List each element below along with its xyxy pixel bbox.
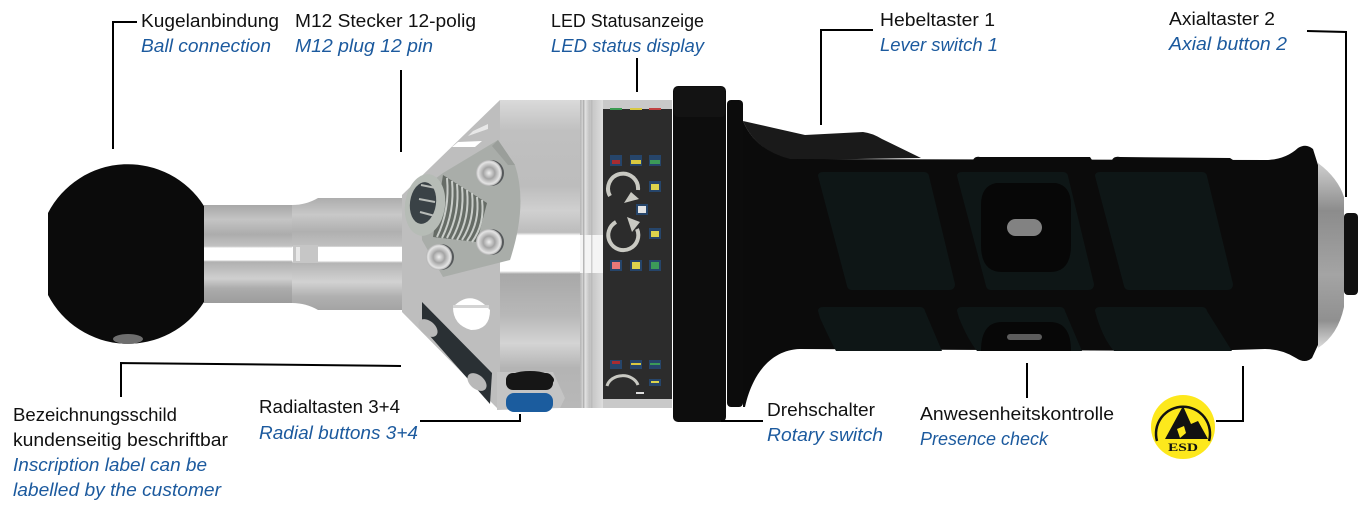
through hole <box>453 298 490 330</box>
callout: inscription label: kundenseitig beschriftbar <box>13 430 228 450</box>
ball connection <box>48 164 204 344</box>
rotary switch knob <box>673 86 743 422</box>
callout: lever switch: Lever switch 1 <box>880 35 998 55</box>
callout: inscription label: Bezeichnungsschild <box>13 405 177 425</box>
shaft <box>204 198 406 310</box>
callout: ball connection: Ball connection <box>141 36 271 56</box>
callout: inscription label: Inscription label can be <box>13 455 207 475</box>
callout: M12 plug <box>295 11 476 152</box>
callout: presence check: Presence check <box>920 429 1049 449</box>
callout: M12 plug: M12 Stecker 12-polig <box>295 11 476 31</box>
callout: lever switch: Hebeltaster 1 <box>880 10 995 30</box>
callout: radial buttons: Radial buttons 3+4 <box>259 423 418 443</box>
radial buttons 3+4 <box>497 371 565 412</box>
callout: inscription label <box>13 363 401 500</box>
axial dome <box>1318 163 1358 348</box>
callout: presence check: Anwesenheitskontrolle <box>920 404 1114 424</box>
LED grid <box>610 155 661 394</box>
callout: lever switch <box>821 10 998 125</box>
housing body <box>402 100 603 408</box>
callout: ball connection: Kugelanbindung <box>141 11 279 31</box>
callout: rotary switch: Drehschalter <box>767 400 875 420</box>
callout: LED status <box>551 11 705 92</box>
screws <box>426 160 504 270</box>
callout: LED status: LED status display <box>551 36 705 56</box>
grip <box>743 121 1318 407</box>
icon: ESD badge <box>1151 395 1215 459</box>
mounting plate <box>420 140 520 277</box>
grip panels <box>818 172 1233 351</box>
callout: ball connection <box>113 11 279 149</box>
callout: radial buttons <box>259 397 520 443</box>
callout: M12 plug: M12 plug 12 pin <box>295 36 433 56</box>
axial button <box>1344 213 1358 295</box>
callout: axial button: Axialtaster 2 <box>1169 9 1275 29</box>
callout: inscription label: labelled by the customer <box>13 480 222 500</box>
LED band <box>603 100 672 408</box>
icon: ESD badge: ESD <box>1168 440 1198 454</box>
callout: radial buttons: Radialtasten 3+4 <box>259 397 400 417</box>
leader: ESD <box>1216 366 1243 421</box>
inscription label plate <box>415 302 492 404</box>
rotation arrows <box>607 174 640 386</box>
callout: LED status: LED Statusanzeige <box>551 11 704 31</box>
callout: rotary switch: Rotary switch <box>767 425 883 445</box>
M12 plug connector <box>401 172 487 242</box>
presence check button <box>981 183 1071 351</box>
callout: rotary switch <box>721 400 883 445</box>
callout: axial button <box>1168 9 1346 197</box>
device illustration: handle <box>48 86 1358 422</box>
callout: axial button: Axial button 2 <box>1168 34 1287 54</box>
callout: presence check <box>920 363 1114 449</box>
